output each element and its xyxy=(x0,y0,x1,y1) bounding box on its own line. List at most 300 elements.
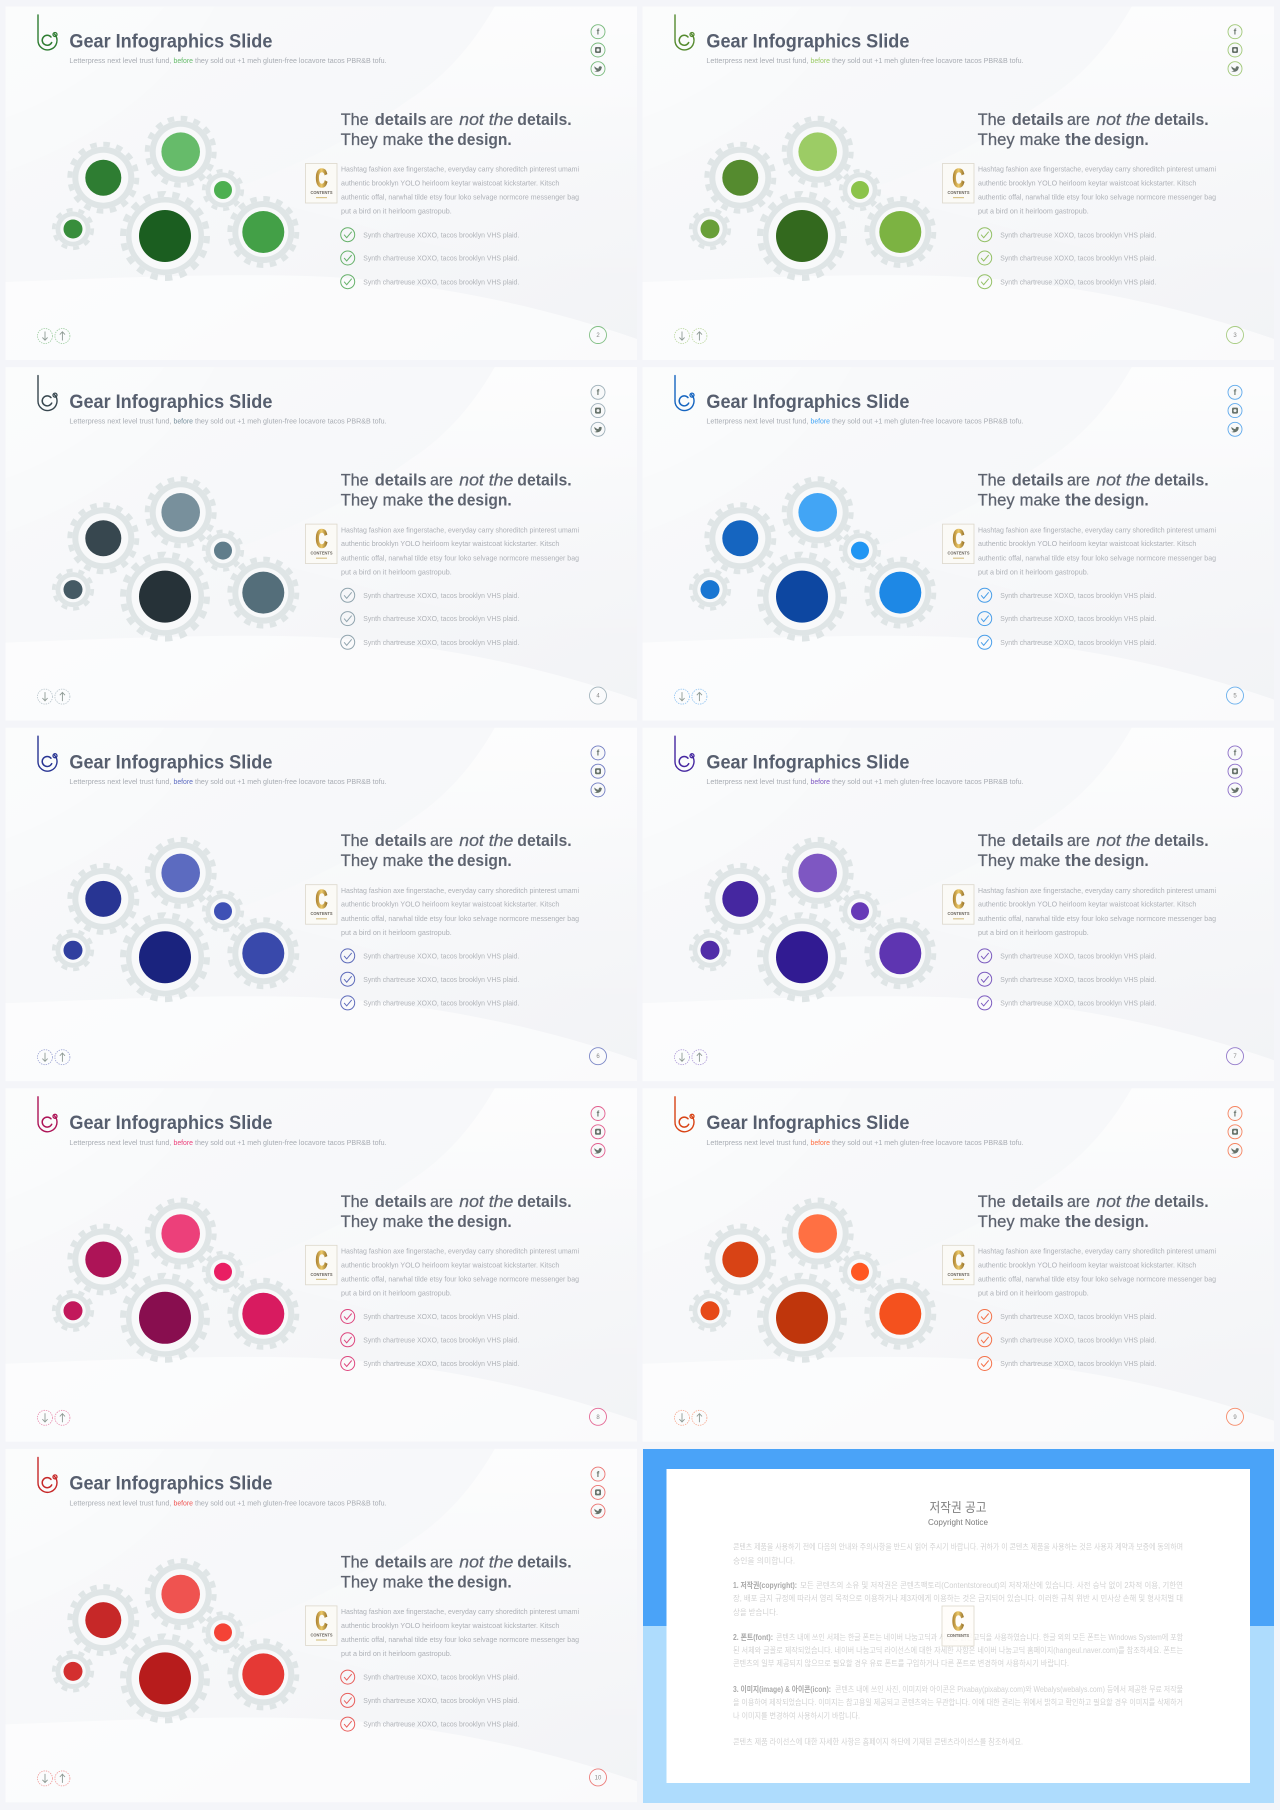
paragraph: put a bird on it heirloom gastropub. xyxy=(341,207,452,216)
heading: Gear Infographics Slide xyxy=(706,391,910,413)
checklist: Synth chartreuse XOXO, tacos brooklyn VHS plaid. xyxy=(1000,230,1156,239)
checklist: Synth chartreuse XOXO, tacos brooklyn VHS plaid. xyxy=(363,277,519,286)
headline: details. xyxy=(1154,1193,1209,1211)
subtitle: before xyxy=(174,779,193,786)
logo badge xyxy=(306,1605,337,1645)
paragraph: authentic brooklyn YOLO heirloom keytar waistcoat kickstarter. Kitsch xyxy=(978,900,1196,909)
gear diagram xyxy=(691,839,934,999)
headline: details. xyxy=(517,1193,572,1211)
headline: details. xyxy=(517,111,572,129)
headline: The xyxy=(978,1193,1006,1211)
subtitle: before xyxy=(174,419,193,426)
logo badge xyxy=(306,884,337,924)
headline: design. xyxy=(1094,852,1149,870)
headline: not the xyxy=(459,1193,513,1211)
navigation arrows xyxy=(38,1410,70,1425)
headline: details. xyxy=(1154,111,1209,129)
social icons: f xyxy=(597,749,600,758)
panel: slide 6 indigo xyxy=(5,727,637,1081)
logo badge xyxy=(942,163,974,203)
social icons: f xyxy=(597,388,600,397)
headline: make xyxy=(383,1213,423,1231)
paragraph: authentic brooklyn YOLO heirloom keytar waistcoat kickstarter. Kitsch xyxy=(341,900,559,909)
social icons xyxy=(1228,25,1242,76)
navigation arrows xyxy=(674,1410,707,1425)
headline: the xyxy=(1065,1213,1091,1231)
checklist: Synth chartreuse XOXO, tacos brooklyn VHS plaid. xyxy=(363,591,519,600)
page number: 5 xyxy=(1233,694,1237,700)
page number: 6 xyxy=(596,1054,600,1060)
gear diagram xyxy=(54,839,297,999)
subtitle: they sold out +1 meh gluten-free locavore tacos PBR&B tofu. xyxy=(195,419,387,426)
headline: The xyxy=(978,472,1006,490)
headline: design. xyxy=(1094,1213,1149,1231)
subtitle: before xyxy=(174,58,193,65)
page number xyxy=(1226,1048,1244,1065)
copyright closing: 콘텐츠 제품 라이선스에 대한 자세한 사항은 홈페이지 하단에 기재된 콘텐츠라이선스를 참조하세요. xyxy=(733,1736,1023,1746)
copyright heading: 저작권 공고 xyxy=(930,1500,987,1515)
gear diagram xyxy=(54,479,297,639)
heading: Gear Infographics Slide xyxy=(69,752,273,774)
copyright subtitle: Copyright Notice xyxy=(928,1518,989,1527)
headline: the xyxy=(428,1573,454,1591)
subtitle: Letterpress next level trust fund, xyxy=(69,1500,171,1507)
paragraph: put a bird on it heirloom gastropub. xyxy=(341,1289,452,1298)
headline: not the xyxy=(1096,1193,1150,1211)
checklist: Synth chartreuse XOXO, tacos brooklyn VHS plaid. xyxy=(363,638,519,647)
paragraph: Hashtag fashion axe fingerstache, everyday carry shoreditch pinterest umami xyxy=(341,165,579,174)
headline: not the xyxy=(459,1553,513,1571)
headline: are xyxy=(1067,472,1090,490)
checklist: Synth chartreuse XOXO, tacos brooklyn VHS plaid. xyxy=(1000,952,1156,961)
headline: the xyxy=(1065,131,1091,149)
paragraph: put a bird on it heirloom gastropub. xyxy=(978,207,1089,216)
checklist: Synth chartreuse XOXO, tacos brooklyn VHS plaid. xyxy=(363,1673,519,1682)
page number xyxy=(1226,326,1244,344)
headline: details. xyxy=(517,832,572,850)
panel: slide 2 green xyxy=(5,6,637,360)
logo badge: C xyxy=(316,163,328,193)
headline: not the xyxy=(1096,832,1150,850)
paragraph: Hashtag fashion axe fingerstache, everyday carry shoreditch pinterest umami xyxy=(978,525,1216,534)
paragraph: authentic brooklyn YOLO heirloom keytar waistcoat kickstarter. Kitsch xyxy=(341,539,559,548)
headline: not the xyxy=(459,472,513,490)
paragraph: authentic offal, narwhal tilde etsy four loko selvage normcore messenger bag xyxy=(341,1635,579,1644)
copyright section 3: 을 이용하여 제작되었습니다. 이미지는 참고용일 제공되고 콘텐츠와는 무관합니다. 이에 대한 권리는 위에서 밝히고 확인하고 필요할 경우 이미지를 삭제하거 xyxy=(733,1697,1183,1707)
headline: details xyxy=(1012,472,1064,490)
subtitle: Letterpress next level trust fund, xyxy=(706,58,808,65)
subtitle: Letterpress next level trust fund, xyxy=(69,419,171,426)
subtitle: before xyxy=(810,58,830,65)
subtitle: Letterpress next level trust fund, xyxy=(69,1140,171,1147)
logo badge: C xyxy=(952,884,965,914)
headline: make xyxy=(1020,852,1060,870)
paragraph: put a bird on it heirloom gastropub. xyxy=(978,1289,1089,1298)
gear diagram xyxy=(691,479,934,639)
social icons: f xyxy=(1234,749,1237,758)
social icons: f xyxy=(597,28,600,36)
headline: design. xyxy=(457,1573,512,1591)
checklist xyxy=(978,1310,1156,1370)
headline: The xyxy=(341,832,369,850)
checklist xyxy=(341,228,519,289)
headline: not the xyxy=(1096,472,1150,490)
subtitle: Letterpress next level trust fund, xyxy=(706,1140,808,1147)
headline: details. xyxy=(517,1553,572,1571)
social icons xyxy=(1228,385,1242,436)
checklist: Synth chartreuse XOXO, tacos brooklyn VHS plaid. xyxy=(1000,998,1156,1008)
headline: The xyxy=(978,832,1006,850)
logo badge xyxy=(306,1245,337,1285)
copyright section 1: 상을 받습니다. xyxy=(733,1607,778,1617)
logo badge xyxy=(942,884,974,924)
gear diagram xyxy=(54,118,297,278)
headline: design. xyxy=(457,492,512,510)
checklist: Synth chartreuse XOXO, tacos brooklyn VHS plaid. xyxy=(1000,975,1156,984)
paragraph: authentic offal, narwhal tilde etsy four loko selvage normcore messenger bag xyxy=(978,1275,1216,1284)
copyright section 1: 1. 저작권(copyright): xyxy=(733,1580,797,1590)
paragraph: authentic brooklyn YOLO heirloom keytar waistcoat kickstarter. Kitsch xyxy=(341,178,559,188)
paragraph: Hashtag fashion axe fingerstache, everyday carry shoreditch pinterest umami xyxy=(341,886,579,895)
headline: They xyxy=(978,852,1015,870)
checklist: Synth chartreuse XOXO, tacos brooklyn VHS plaid. xyxy=(363,952,519,961)
subtitle: before xyxy=(810,779,830,786)
copyright intro: 승인을 의미합니다. xyxy=(733,1556,795,1566)
paragraph: put a bird on it heirloom gastropub. xyxy=(341,1649,452,1658)
navigation arrows xyxy=(674,689,707,704)
logo badge: CONTENTS xyxy=(948,551,970,556)
checklist: Synth chartreuse XOXO, tacos brooklyn VHS plaid. xyxy=(1000,638,1156,647)
logo badge: C xyxy=(952,1245,965,1275)
headline: make xyxy=(383,131,423,149)
social icons xyxy=(591,1106,605,1158)
headline: The xyxy=(341,1193,369,1211)
social icons xyxy=(591,746,605,797)
icon: logo xyxy=(38,1097,57,1132)
logo badge xyxy=(306,524,337,564)
icon: logo xyxy=(38,376,57,411)
navigation arrows xyxy=(38,1771,70,1786)
headline: not the xyxy=(1096,111,1150,129)
social icons: f xyxy=(1234,28,1237,36)
headline: design. xyxy=(1094,131,1149,149)
panel: slide 4 blue grey xyxy=(5,367,637,721)
headline: details xyxy=(375,832,427,850)
headline: They xyxy=(341,1573,378,1591)
social icons: f xyxy=(1234,388,1237,397)
paragraph: Hashtag fashion axe fingerstache, everyday carry shoreditch pinterest umami xyxy=(341,1607,579,1616)
icon: logo xyxy=(675,1097,694,1132)
subtitle: Letterpress next level trust fund, xyxy=(706,779,808,786)
copyright section 3: 콘텐츠 내에 쓰인 사진, 이미지와 아이콘은 Pixabay(pixabay.com)와 Webalys(webalys.com) 등에서 제공한 무료 저작물 xyxy=(835,1684,1183,1694)
checklist: Synth chartreuse XOXO, tacos brooklyn VHS plaid. xyxy=(1000,277,1156,286)
logo badge: CONTENTS xyxy=(310,911,333,916)
logo badge: C xyxy=(952,163,965,193)
headline: They xyxy=(978,131,1015,149)
subtitle: before xyxy=(810,419,830,426)
copyright section 2: 2. 폰트(font): xyxy=(733,1633,773,1642)
paragraph: authentic offal, narwhal tilde etsy four loko selvage normcore messenger bag xyxy=(341,914,579,923)
heading: Gear Infographics Slide xyxy=(69,30,273,52)
headline: details xyxy=(1012,1193,1064,1211)
page number: 3 xyxy=(1233,333,1237,339)
icon: logo xyxy=(675,736,694,771)
heading: Gear Infographics Slide xyxy=(69,1112,273,1134)
logo badge xyxy=(942,1606,974,1646)
logo badge: C xyxy=(316,1245,328,1275)
page number xyxy=(590,326,606,344)
subtitle: they sold out +1 meh gluten-free locavore tacos PBR&B tofu. xyxy=(832,419,1024,426)
gear diagram xyxy=(691,118,934,278)
logo badge: CONTENTS xyxy=(310,1632,333,1637)
headline: The xyxy=(341,472,369,490)
gear diagram xyxy=(54,1200,297,1360)
headline: The xyxy=(978,111,1006,129)
subtitle: they sold out +1 meh gluten-free locavore tacos PBR&B tofu. xyxy=(832,58,1024,65)
headline: are xyxy=(1067,832,1090,850)
paragraph: authentic offal, narwhal tilde etsy four loko selvage normcore messenger bag xyxy=(978,914,1216,923)
checklist: Synth chartreuse XOXO, tacos brooklyn VHS plaid. xyxy=(1000,591,1156,600)
page number xyxy=(590,1048,606,1065)
panel: slide 8 pink xyxy=(5,1088,637,1442)
panel: slide 10 red xyxy=(5,1448,637,1802)
logo badge: C xyxy=(316,524,328,554)
headline: They xyxy=(978,1213,1015,1231)
icon: logo xyxy=(38,736,57,771)
headline: make xyxy=(383,492,423,510)
headline: the xyxy=(1065,852,1091,870)
copyright section 3: 나 이미지를 변경하여 사용하시기 바랍니다. xyxy=(733,1710,860,1720)
panel: slide 7 deep purple xyxy=(642,727,1274,1081)
page number: 9 xyxy=(1233,1415,1237,1421)
headline: details xyxy=(375,472,427,490)
gear diagram xyxy=(691,1200,934,1360)
copyright section 2: 된 서체와 글꼴로 제작되었습니다. 네이버 나눔고딕 라이선스에 대한 자세한 사항은 네이버 나눔고딕 홈페이지(hangeul.naver.com)를 참조하세요. 폰트는 xyxy=(733,1645,1183,1655)
copyright intro: 콘텐츠 제품을 사용하기 전에 다음의 안내와 주의사항을 반드시 읽어 주시기 바랍니다. 귀하가 이 콘텐츠 제품을 사용하는 것은 사용자 계약과 보증에 동의하며 xyxy=(733,1542,1183,1552)
headline: design. xyxy=(457,852,512,870)
logo badge: CONTENTS xyxy=(948,190,970,195)
subtitle: they sold out +1 meh gluten-free locavore tacos PBR&B tofu. xyxy=(195,779,387,786)
social icons xyxy=(1228,1106,1242,1158)
paragraph: put a bird on it heirloom gastropub. xyxy=(978,928,1089,937)
headline: details. xyxy=(1154,472,1209,490)
headline: are xyxy=(430,472,453,490)
headline: are xyxy=(430,111,453,129)
checklist: Synth chartreuse XOXO, tacos brooklyn VHS plaid. xyxy=(363,998,519,1008)
panel: slide 9 deep orange xyxy=(642,1088,1274,1442)
checklist xyxy=(341,949,519,1010)
subtitle: they sold out +1 meh gluten-free locavore tacos PBR&B tofu. xyxy=(195,58,387,65)
headline: The xyxy=(341,111,369,129)
subtitle: they sold out +1 meh gluten-free locavore tacos PBR&B tofu. xyxy=(195,1500,387,1507)
headline: They xyxy=(341,492,378,510)
navigation arrows xyxy=(38,689,70,704)
logo badge: C xyxy=(316,884,328,914)
copyright section 2: 콘텐츠의 일부 제공되지 않으므로 필요할 경우 유료 폰트를 구입하거나 다른 폰트로 변경하여 사용하시기 바랍니다. xyxy=(733,1658,1069,1668)
headline: make xyxy=(1020,131,1060,149)
checklist xyxy=(341,588,519,649)
page number xyxy=(590,1408,606,1425)
heading: Gear Infographics Slide xyxy=(706,752,910,774)
checklist: Synth chartreuse XOXO, tacos brooklyn VHS plaid. xyxy=(1000,1359,1156,1368)
checklist: Synth chartreuse XOXO, tacos brooklyn VHS plaid. xyxy=(1000,1312,1156,1321)
checklist: Synth chartreuse XOXO, tacos brooklyn VHS plaid. xyxy=(1000,254,1156,263)
logo badge: C xyxy=(316,1605,328,1635)
page number xyxy=(1226,687,1244,704)
navigation arrows xyxy=(38,1050,70,1065)
headline: are xyxy=(430,832,453,850)
checklist: Synth chartreuse XOXO, tacos brooklyn VHS plaid. xyxy=(363,1359,519,1368)
headline: not the xyxy=(459,832,513,850)
headline: the xyxy=(428,131,454,149)
checklist: Synth chartreuse XOXO, tacos brooklyn VHS plaid. xyxy=(363,975,519,984)
headline: make xyxy=(383,852,423,870)
icon: logo xyxy=(38,1457,57,1492)
headline: The xyxy=(341,1553,369,1571)
headline: They xyxy=(341,852,378,870)
logo badge: C xyxy=(952,1606,964,1636)
logo badge: CONTENTS xyxy=(948,1272,970,1277)
checklist: Synth chartreuse XOXO, tacos brooklyn VHS plaid. xyxy=(363,254,519,263)
paragraph: authentic offal, narwhal tilde etsy four loko selvage normcore messenger bag xyxy=(341,1275,579,1284)
heading: Gear Infographics Slide xyxy=(69,391,273,413)
panel: slide 3 light green xyxy=(642,6,1274,360)
checklist: Synth chartreuse XOXO, tacos brooklyn VHS plaid. xyxy=(363,1696,519,1705)
subtitle: Letterpress next level trust fund, xyxy=(69,779,171,786)
page number: 10 xyxy=(595,1775,602,1781)
headline: make xyxy=(1020,1213,1060,1231)
checklist: Synth chartreuse XOXO, tacos brooklyn VHS plaid. xyxy=(363,1335,519,1344)
checklist: Synth chartreuse XOXO, tacos brooklyn VHS plaid. xyxy=(1000,1335,1156,1344)
page number xyxy=(590,1769,606,1786)
subtitle: before xyxy=(174,1140,193,1147)
headline: make xyxy=(383,1573,423,1591)
navigation arrows xyxy=(38,328,70,344)
panel: slide 5 blue xyxy=(642,367,1274,721)
social icons: f xyxy=(1234,1109,1237,1118)
headline: details. xyxy=(1154,832,1209,850)
headline: details. xyxy=(517,472,572,490)
headline: They xyxy=(341,1213,378,1231)
icon: logo xyxy=(675,15,694,50)
headline: They xyxy=(341,131,378,149)
checklist xyxy=(341,1670,519,1731)
headline: make xyxy=(1020,492,1060,510)
headline: the xyxy=(1065,492,1091,510)
icon: logo xyxy=(38,15,57,50)
social icons: f xyxy=(597,1470,600,1479)
social icons xyxy=(591,25,605,76)
social icons xyxy=(1228,746,1242,797)
heading: Gear Infographics Slide xyxy=(69,1473,273,1495)
headline: details xyxy=(1012,832,1064,850)
headline: the xyxy=(428,1213,454,1231)
subtitle: before xyxy=(810,1140,830,1147)
page number: 8 xyxy=(596,1415,600,1421)
checklist xyxy=(341,1310,519,1370)
paragraph: authentic offal, narwhal tilde etsy four loko selvage normcore messenger bag xyxy=(978,193,1216,202)
logo badge: CONTENTS xyxy=(948,911,970,916)
logo badge: CONTENTS xyxy=(310,190,333,195)
page number: 7 xyxy=(1233,1054,1237,1060)
headline: They xyxy=(978,492,1015,510)
social icons xyxy=(591,385,605,436)
copyright section 1: 모든 콘텐츠의 소유 및 저작권은 콘텐츠팩토리(Contentstoreout)의 저작재산에 있습니다. 사전 승낙 없이 2차적 이용, 기한연 xyxy=(800,1580,1183,1590)
checklist xyxy=(978,588,1156,649)
copyright section 1: 장, 배포 금지 규정에 따라서 영리 목적으로 이용하거나 제3자에게 이용하는 것은 금지되어 있습니다. 이러한 규칙 위반 시 민사상 손해 및 형사처벌 대 xyxy=(733,1593,1183,1603)
paragraph: authentic brooklyn YOLO heirloom keytar waistcoat kickstarter. Kitsch xyxy=(341,1260,559,1269)
copyright section 2: 콘텐츠 내에 쓰인 서체는 한글 폰트는 네이버 나눔고딕과 서체는 맑은고딕을 사용하였습니다. 한글 외의 모든 폰트는 Windows System에 포함 xyxy=(776,1632,1184,1642)
icon: logo xyxy=(675,376,694,411)
checklist: Synth chartreuse XOXO, tacos brooklyn VHS plaid. xyxy=(363,230,519,239)
headline: design. xyxy=(457,131,512,149)
logo badge: CONTENTS xyxy=(310,551,333,556)
subtitle: before xyxy=(174,1500,193,1507)
headline: details xyxy=(375,1193,427,1211)
paragraph: authentic brooklyn YOLO heirloom keytar waistcoat kickstarter. Kitsch xyxy=(341,1621,559,1630)
headline: the xyxy=(428,852,454,870)
checklist xyxy=(978,228,1156,289)
logo badge: CONTENTS xyxy=(947,1633,969,1638)
logo badge: CONTENTS xyxy=(310,1272,333,1277)
headline: not the xyxy=(459,111,513,129)
paragraph: put a bird on it heirloom gastropub. xyxy=(978,567,1089,576)
headline: the xyxy=(428,492,454,510)
social icons: f xyxy=(597,1109,600,1118)
logo badge xyxy=(306,163,337,203)
paragraph: Hashtag fashion axe fingerstache, everyday carry shoreditch pinterest umami xyxy=(341,1247,579,1256)
social icons xyxy=(591,1467,605,1518)
checklist: Synth chartreuse XOXO, tacos brooklyn VHS plaid. xyxy=(363,1720,519,1729)
subtitle: Letterpress next level trust fund, xyxy=(69,58,171,65)
headline: are xyxy=(430,1193,453,1211)
page number xyxy=(590,687,606,704)
page number xyxy=(1226,1408,1244,1425)
checklist xyxy=(978,949,1156,1010)
heading: Gear Infographics Slide xyxy=(706,30,910,52)
paragraph: Hashtag fashion axe fingerstache, everyday carry shoreditch pinterest umami xyxy=(978,1247,1216,1256)
headline: design. xyxy=(457,1213,512,1231)
subtitle: they sold out +1 meh gluten-free locavore tacos PBR&B tofu. xyxy=(832,1140,1024,1147)
paragraph: Hashtag fashion axe fingerstache, everyday carry shoreditch pinterest umami xyxy=(341,525,579,534)
panel: copyright notice xyxy=(643,1449,1274,1803)
subtitle: they sold out +1 meh gluten-free locavore tacos PBR&B tofu. xyxy=(195,1140,387,1147)
subtitle: Letterpress next level trust fund, xyxy=(706,419,808,426)
paragraph: authentic brooklyn YOLO heirloom keytar waistcoat kickstarter. Kitsch xyxy=(978,178,1196,188)
navigation arrows xyxy=(674,1050,707,1065)
logo badge xyxy=(942,1245,974,1285)
subtitle: they sold out +1 meh gluten-free locavore tacos PBR&B tofu. xyxy=(832,779,1024,786)
headline: details xyxy=(375,1553,427,1571)
paragraph: authentic offal, narwhal tilde etsy four loko selvage normcore messenger bag xyxy=(978,553,1216,562)
paragraph: authentic brooklyn YOLO heirloom keytar waistcoat kickstarter. Kitsch xyxy=(978,1260,1196,1269)
page number: 2 xyxy=(596,333,600,339)
headline: are xyxy=(1067,1193,1090,1211)
paragraph: Hashtag fashion axe fingerstache, everyday carry shoreditch pinterest umami xyxy=(978,165,1216,174)
paragraph: put a bird on it heirloom gastropub. xyxy=(341,567,452,576)
headline: are xyxy=(430,1553,453,1571)
headline: are xyxy=(1067,111,1090,129)
paragraph: authentic brooklyn YOLO heirloom keytar waistcoat kickstarter. Kitsch xyxy=(978,539,1196,548)
headline: details xyxy=(375,111,427,129)
paragraph: Hashtag fashion axe fingerstache, everyday carry shoreditch pinterest umami xyxy=(978,886,1216,895)
page number: 4 xyxy=(596,694,600,700)
checklist: Synth chartreuse XOXO, tacos brooklyn VHS plaid. xyxy=(363,614,519,623)
paragraph: put a bird on it heirloom gastropub. xyxy=(341,928,452,937)
paragraph: authentic offal, narwhal tilde etsy four loko selvage normcore messenger bag xyxy=(341,193,579,202)
navigation arrows xyxy=(674,328,707,344)
headline: details xyxy=(1012,111,1064,129)
